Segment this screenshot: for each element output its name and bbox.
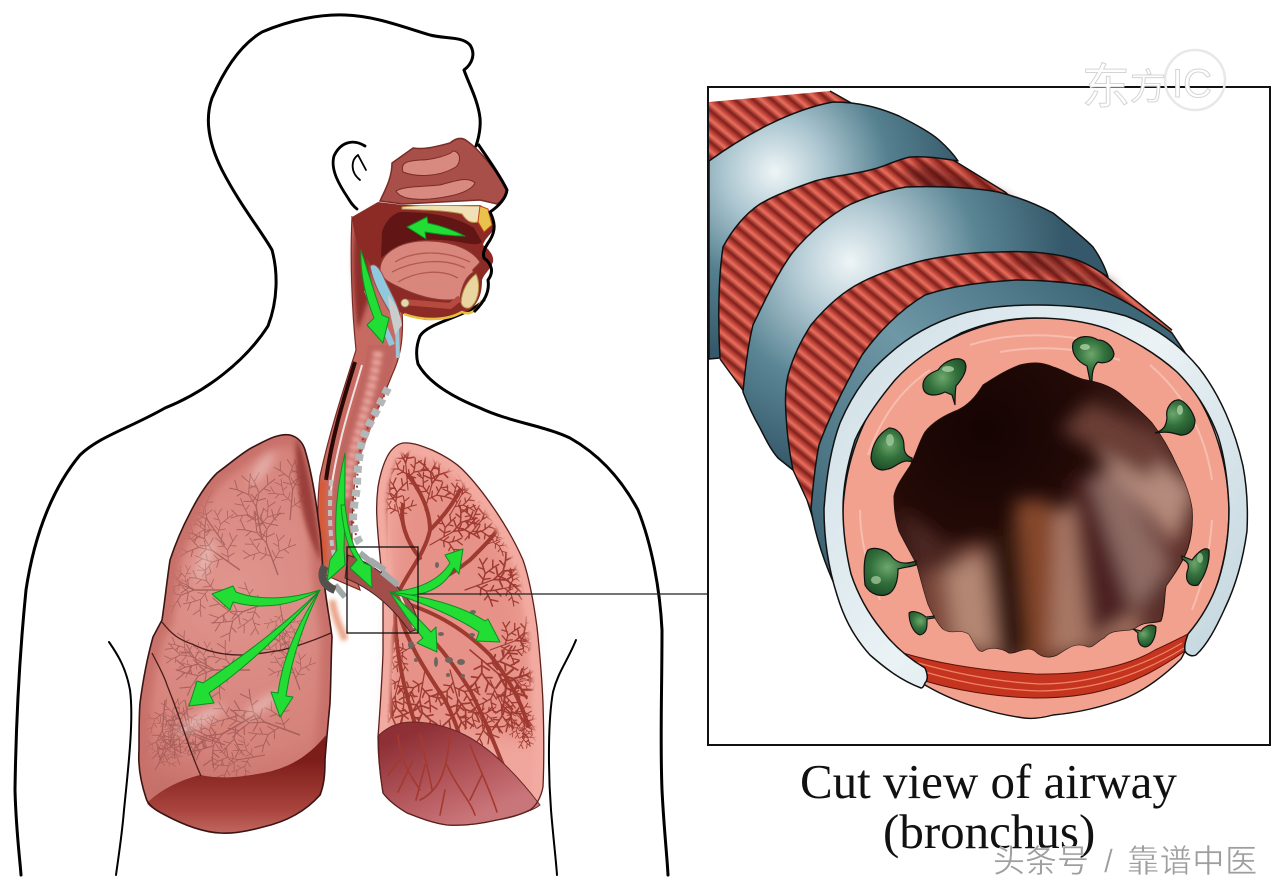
gland 8 bbox=[1133, 625, 1156, 647]
arrow: right lung lower medial bbox=[271, 590, 320, 717]
right lung outline bbox=[139, 435, 332, 833]
gland 4 bbox=[871, 428, 912, 470]
airway muscle bbox=[903, 634, 1188, 698]
lumen bbox=[894, 363, 1192, 657]
panel: cut view of airway bbox=[708, 87, 1270, 745]
arrow: pharynx bbox=[361, 250, 389, 343]
gland 3 bbox=[1155, 400, 1195, 435]
gland 7 bbox=[909, 612, 934, 635]
right lung bronchial veins bbox=[147, 459, 316, 778]
left lung diaphragmatic surface bbox=[379, 722, 540, 825]
nasal cavity bbox=[380, 139, 507, 204]
arrow: trachea left branch bbox=[327, 453, 345, 581]
jaw bone and fat bbox=[461, 274, 479, 308]
gland 2 bbox=[923, 359, 966, 405]
gland 5 bbox=[864, 548, 916, 595]
arrow: left lung lateral bbox=[390, 592, 500, 642]
left lung rim bbox=[378, 444, 542, 744]
muscle shading bbox=[900, 165, 1120, 290]
left lung medial fold bbox=[378, 455, 397, 590]
muscle tube bbox=[709, 91, 1172, 640]
watermark: top right: 方 bbox=[1130, 66, 1166, 107]
left lung outline bbox=[377, 443, 544, 825]
throat and trachea bbox=[318, 205, 403, 590]
palate bone bbox=[402, 205, 480, 223]
esophagus dark stripe bbox=[326, 362, 355, 480]
body outline bbox=[15, 15, 668, 875]
right lung bbox=[133, 435, 332, 833]
hilar vessels bbox=[408, 562, 476, 678]
panel frame bbox=[708, 87, 1270, 745]
cartilage band 1 bbox=[709, 102, 958, 359]
arrow: right lung lower lateral bbox=[189, 590, 320, 706]
right lung rim bbox=[139, 435, 332, 833]
mucosa disc bbox=[843, 318, 1229, 718]
cartilage band 3 bbox=[811, 280, 1200, 590]
pharynx shading bbox=[353, 205, 378, 330]
callout leader line bbox=[418, 593, 708, 595]
airflow arrows bbox=[189, 217, 500, 717]
caption: cut view of airway: Cut view of airway bbox=[800, 754, 1177, 809]
arrow: right lung upper bbox=[212, 586, 320, 610]
right lung medial shadow bbox=[296, 438, 321, 561]
watermark: top right: IC bbox=[1172, 62, 1212, 106]
watermark: bottom right bbox=[993, 843, 1258, 879]
arrow: left lung lower bbox=[390, 592, 437, 652]
right lung highlights bbox=[173, 449, 283, 739]
bronchi bbox=[322, 553, 421, 640]
cartilage ring bbox=[824, 305, 1247, 688]
epiglottis bbox=[370, 265, 400, 320]
tongue bbox=[380, 241, 480, 300]
profile outline bbox=[474, 144, 507, 312]
cartilage band 2 bbox=[743, 187, 1108, 470]
watermark: bottom right: 头条号 bbox=[993, 843, 1089, 879]
callout box on bronchus bbox=[347, 547, 418, 633]
arrow: trachea right branch bbox=[341, 505, 372, 588]
right lung fissures bbox=[152, 622, 331, 776]
arrow: left lung upper bbox=[390, 549, 463, 595]
nasal turbinates bbox=[402, 151, 460, 175]
left lung bronchial tree bbox=[384, 450, 536, 764]
tracheal rings bbox=[353, 388, 388, 543]
right lung base bbox=[147, 735, 326, 833]
head cross section bbox=[352, 139, 507, 335]
trachea lumen bbox=[334, 345, 396, 550]
gland 6 bbox=[1182, 549, 1209, 585]
panel border bbox=[708, 87, 1270, 745]
left lung parenchyma bbox=[390, 455, 532, 740]
lumen shading bbox=[900, 400, 1195, 660]
caption: bronchus: (bronchus) bbox=[883, 804, 1095, 859]
watermark: top right bbox=[1082, 50, 1225, 114]
gland 1 bbox=[1073, 337, 1114, 381]
icon: ear bbox=[333, 142, 366, 209]
watermark: top right: 东 bbox=[1082, 61, 1130, 114]
oral cavity bbox=[352, 202, 495, 320]
left lung bbox=[376, 442, 544, 826]
watermark: bottom right: 靠谱中医 bbox=[1127, 843, 1258, 879]
watermark: bottom right: / bbox=[1104, 843, 1113, 879]
basal branches bbox=[388, 735, 497, 815]
arrow: nose bbox=[407, 217, 465, 239]
mucosa folds bbox=[860, 335, 1212, 610]
mouth cavity bbox=[381, 212, 482, 258]
